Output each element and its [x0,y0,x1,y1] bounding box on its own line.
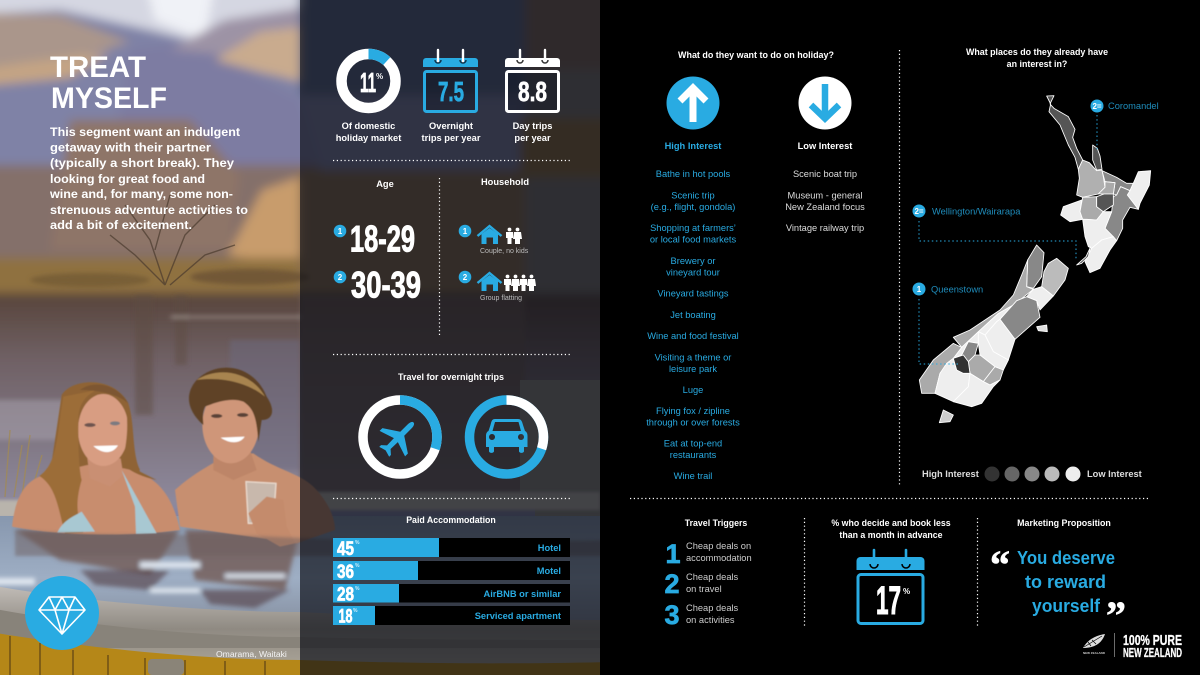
calendar: day trips: 8.8 [518,76,547,107]
quote: to reward [1025,572,1106,592]
list: low interest activities: Vintage railway trip [786,223,864,233]
list: high interest activities: Wine and food festival [647,331,739,341]
callout: Queenstown [912,282,983,364]
mesh behind dark panel [520,380,600,516]
trigger 1 [665,539,752,569]
age rank 2: 30-39 [351,264,421,306]
list: high interest activities: through or over forests [646,418,740,428]
bar: motel 36 percent: 36 [337,562,354,583]
bar: motel 36 percent: Motel [537,566,561,576]
list: high interest activities: Flying fox / zipline [656,406,730,416]
list: high interest activities: Jet boating [670,310,716,320]
list: low interest activities: New Zealand focus [785,202,865,212]
icon: diamond badge [25,576,99,650]
trigger 1: accommodation [686,553,752,563]
panel: travel for overnight trips [363,372,544,474]
title: TREAT [50,51,146,84]
intro text: strenuous adventure activities to [50,203,248,217]
list: high interest activities: Bathe in hot pools [656,169,731,179]
callout: Queenstown: 1 [917,285,922,294]
dark translucent panel [300,0,600,675]
intro text: getaway with their partner [50,140,211,154]
bar: serviced apartment 18 percent: % [353,608,358,614]
label: day trips: per year [514,133,551,143]
bar: hotel 45 percent: Hotel [538,543,561,553]
couple [12,368,335,547]
calendar: day trips [505,50,560,112]
list: high interest activities: Luge [683,385,703,395]
quote [990,542,1126,638]
bar: hotel 45 percent [333,538,570,560]
calendar: overnight trips: 7.5 [438,76,464,107]
list: high interest activities: leisure park [669,364,717,374]
callout: Wellington/Wairarapa: Wellington/Wairarapa [932,206,1021,216]
panel: key stats [336,50,560,143]
bar: hotel 45 percent: % [355,540,360,546]
map legend: High Interest [922,469,979,479]
list: high interest activities: Eat at top-end [664,438,722,448]
bar: motel 36 percent [333,561,570,583]
panel: holiday activities [646,50,865,481]
calendar: 17 percent: 17 [876,579,901,623]
label: day trips: Day trips [513,121,552,131]
list: high interest activities: Wine trail [674,471,712,481]
photo: couple in hot tub by a lake [0,0,640,675]
callout: Wellington/Wairarapa [912,204,1076,260]
bar: serviced apartment 18 percent: 18 [338,606,352,628]
intro text: wine and, for many, some non- [49,187,233,201]
panel: age [334,179,421,306]
callout: Coromandel [1090,100,1159,152]
water over bodies [15,530,620,556]
woman [50,382,140,480]
heading: travel triggers: Travel Triggers [685,518,747,528]
intro text: looking for great food and [50,172,205,186]
trigger 3: 3 [664,600,680,630]
household rank 1: Couple, no kids [480,248,529,255]
household rank 2: 2 [463,273,468,282]
calendar: overnight trips [423,50,478,112]
list: high interest activities: or local food markets [650,234,736,244]
back rim of tub [0,492,600,518]
heading: paid accommodation: Paid Accommodation [406,515,496,525]
age rank 2 [334,264,421,306]
callout: Coromandel: Coromandel [1108,101,1159,111]
panel: household [459,177,536,302]
intro text: add a bit of excitement. [50,218,192,232]
trigger 2: on travel [686,584,722,594]
trigger 3: on activities [686,615,735,625]
heading: high interest: High Interest [665,141,721,151]
bar: serviced apartment 18 percent [333,606,570,628]
map legend: Low Interest [1087,469,1142,479]
bar: AirBNB 28 percent: AirBNB or similar [484,589,561,599]
tub water [0,516,600,612]
heading: travel: Travel for overnight trips [398,372,504,382]
quote: ” [1106,593,1126,638]
reeds [4,430,42,497]
list: low interest activities [785,169,865,233]
household rank 2: Group flatting [480,295,522,302]
quote: You deserve [1017,548,1115,568]
age rank 1 [334,218,415,260]
icon: high interest arrow [666,76,720,130]
list: high interest activities: (e.g., flight, gondola) [651,202,735,212]
list: low interest activities: Museum - general [788,190,862,200]
bare tree [110,195,235,285]
label: overnight trips: Overnight [429,121,473,131]
label: overnight trips: trips per year [422,133,481,143]
quote: yourself [1032,596,1101,616]
trigger 2: 2 [664,569,680,599]
heading: booking lead time: % who decide and book less [831,518,951,528]
bar: hotel 45 percent: 45 [337,539,354,560]
bar: AirBNB 28 percent [333,584,570,606]
title: MYSELF [51,82,167,115]
map: North Island [1047,96,1151,273]
list: high interest activities [646,169,740,481]
donut: 11 percent of market: % [376,72,383,81]
age rank 1: 18-29 [350,218,415,260]
household rank 1: 1 [463,227,468,236]
household rank 2 [459,271,536,302]
panel: places of interest map [912,47,1159,482]
glass and hand [246,482,276,523]
list: low interest activities: Scenic boat trip [793,169,857,179]
logo: 100% Pure New Zealand: NEW ZEALAND [1083,651,1106,655]
trigger 2: Cheap deals [686,572,739,582]
trigger 2 [664,569,739,599]
heading: age: Age [376,179,394,189]
heading: household: Household [481,177,529,187]
panel: paid accommodation bars [333,515,570,628]
man [175,453,335,543]
label: domestic market: holiday market [336,133,401,143]
bar: AirBNB 28 percent: % [355,586,360,592]
icon: low interest arrow [798,76,852,130]
donut: car [470,400,544,474]
heading: marketing proposition: Marketing Proposition [1017,518,1111,528]
intro text: (typically a short break). They [50,156,234,170]
list: high interest activities: Shopping at farmers’ [650,223,736,233]
trigger 1: 1 [665,539,681,569]
callout: Queenstown: Queenstown [931,284,983,294]
intro text [49,125,248,232]
list: high interest activities: restaurants [670,450,717,460]
list: high interest activities: Vineyard tastings [657,288,729,298]
calendar: 17 percent [856,550,924,624]
heading: holiday activities: What do they want to do on holiday? [678,50,834,60]
rim and wood [0,585,610,665]
label: domestic market: Of domestic [342,121,395,131]
donut: 11 percent of market: 11 [360,67,376,98]
panel: travel triggers [664,518,752,630]
trigger 3 [664,600,739,630]
donut: 11 percent of market [342,54,396,108]
intro text: This segment want an indulgent [50,125,240,139]
calendar: 17 percent: % [903,587,910,596]
list: high interest activities: Brewery or [671,256,715,266]
heading: places: an interest in? [1007,59,1067,69]
age rank 1: 1 [338,227,343,236]
quote: “ [990,542,1010,587]
bar: serviced apartment 18 percent: Serviced apartment [475,611,561,621]
age rank 2: 2 [338,273,343,282]
list: high interest activities: vineyard tour [666,268,720,278]
trigger 3: Cheap deals [686,603,739,613]
callout: Wellington/Wairarapa: 2= [914,207,924,216]
photo caption: Omarama, Waitaki [216,649,287,659]
list: high interest activities: Scenic trip [671,190,715,200]
panel: booking lead time [831,518,951,624]
map legend [922,466,1142,482]
logo: 100% Pure New Zealand [1083,633,1182,660]
bar: AirBNB 28 percent: 28 [337,584,354,606]
callout: Coromandel: 2= [1092,102,1102,111]
list: high interest activities: Visiting a theme or [655,352,731,362]
heading: low interest: Low Interest [798,141,852,151]
donut: plane [363,400,437,474]
trigger 1: Cheap deals on [686,541,751,551]
household rank 1 [459,225,529,255]
bar: motel 36 percent: % [355,563,360,569]
heading: places: What places do they already have [966,47,1108,57]
panel: marketing proposition [990,518,1126,638]
heading: booking lead time: than a month in advance [839,530,943,540]
map: South Island [919,245,1068,423]
